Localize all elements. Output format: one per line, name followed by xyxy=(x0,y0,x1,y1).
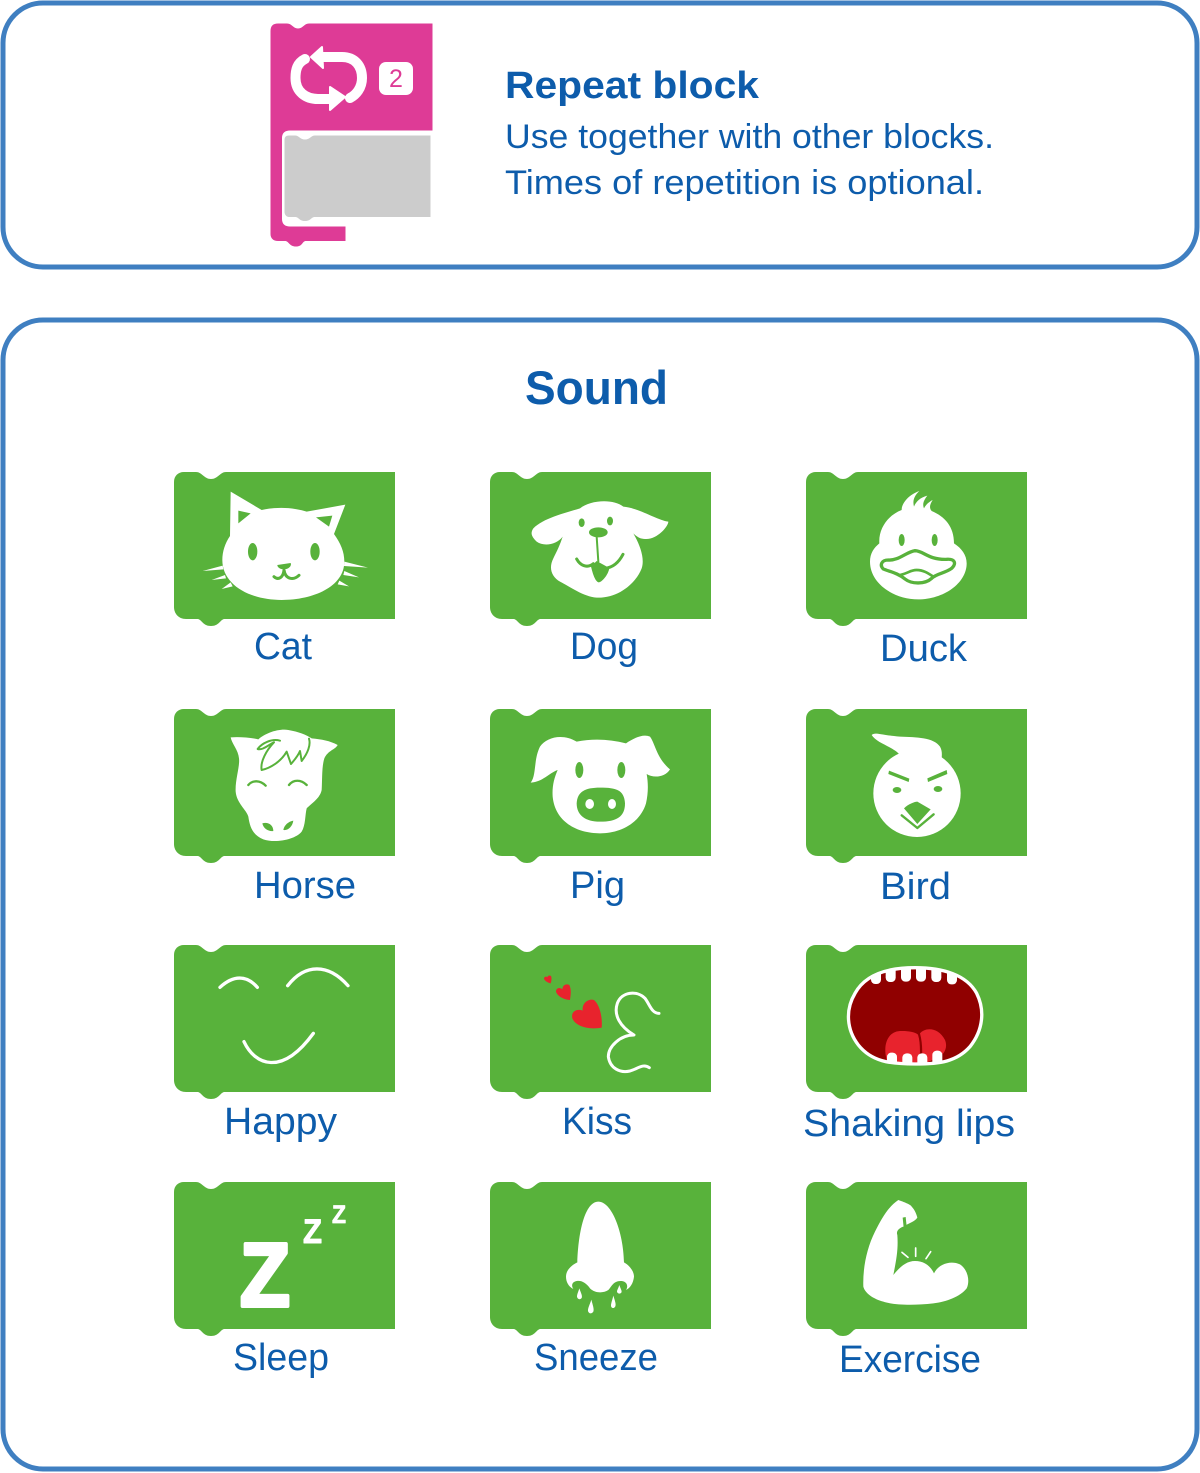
icon: flexed arm xyxy=(863,1200,968,1305)
label: Pig: Pig xyxy=(570,865,625,907)
block: sleep xyxy=(174,1182,395,1379)
green block: horse xyxy=(174,709,395,863)
panel border: sound xyxy=(3,320,1197,1469)
badge: repeat count xyxy=(379,62,413,95)
block: pig xyxy=(490,709,711,907)
block: sneeze xyxy=(490,1182,711,1379)
block: bird xyxy=(806,709,1027,908)
icon: sleeping Z letters: Z xyxy=(240,1226,290,1326)
panel: sound xyxy=(3,320,1197,1469)
icon: bird face xyxy=(872,734,961,837)
green block: sleep xyxy=(174,1182,395,1336)
icon: open mouth xyxy=(848,963,982,1070)
badge: repeat count: 2 xyxy=(389,65,403,93)
green block: kiss xyxy=(490,945,711,1099)
label: Sleep: Sleep xyxy=(233,1337,329,1379)
label: Horse: Horse xyxy=(254,865,356,907)
icon: horse face xyxy=(231,730,338,841)
green block: duck xyxy=(806,472,1027,626)
grey empty slot xyxy=(284,136,430,221)
panel: repeat block xyxy=(3,3,1197,267)
pink block body xyxy=(270,24,432,246)
icon: sneezing nose xyxy=(566,1202,634,1313)
label: Shaking lips: Shaking lips xyxy=(803,1103,1015,1145)
icon: sleeping Z letters: Z xyxy=(332,1201,346,1229)
label: Sneeze: Sneeze xyxy=(534,1337,658,1379)
green block: exercise xyxy=(806,1182,1027,1336)
green block: bird xyxy=(806,709,1027,863)
block: duck xyxy=(806,472,1027,670)
label: Kiss: Kiss xyxy=(562,1101,632,1143)
green block: shaking lips xyxy=(806,945,1027,1099)
green block: happy xyxy=(174,945,395,1099)
icon: repeat block xyxy=(270,24,432,246)
text block: repeat description: Times of repetition is optional. xyxy=(505,164,984,202)
icon: cat face xyxy=(203,492,368,600)
block: exercise xyxy=(806,1182,1027,1381)
text block: repeat description xyxy=(505,118,994,202)
block: dog xyxy=(490,472,711,668)
block: cat xyxy=(174,472,395,668)
green block: dog xyxy=(490,472,711,626)
green block: sneeze xyxy=(490,1182,711,1336)
label: Cat: Cat xyxy=(254,626,312,668)
block: shaking lips xyxy=(803,945,1027,1145)
text block: repeat description: Use together with other blocks. xyxy=(505,118,994,156)
icon: sleeping Z letters xyxy=(240,1201,346,1326)
block: horse xyxy=(174,709,395,907)
icon: pig face xyxy=(531,736,670,833)
label: Bird: Bird xyxy=(880,866,951,908)
label: Dog: Dog xyxy=(570,626,638,668)
heading: sound: Sound xyxy=(525,361,668,414)
green block: pig xyxy=(490,709,711,863)
label: Duck: Duck xyxy=(880,628,968,670)
block: happy xyxy=(174,945,395,1143)
block: kiss xyxy=(490,945,711,1143)
icon: happy face xyxy=(220,969,348,1063)
green block: cat xyxy=(174,472,395,626)
heading: repeat block: Repeat block xyxy=(505,65,760,107)
label: Exercise: Exercise xyxy=(839,1339,981,1381)
icon: duck face xyxy=(870,491,967,599)
label: Happy: Happy xyxy=(224,1101,337,1143)
icon: dog face xyxy=(532,501,668,598)
icon: kiss lips and hearts xyxy=(544,975,659,1072)
icon: sleeping Z letters: Z xyxy=(303,1213,322,1251)
icon: loop arrows xyxy=(296,47,362,110)
panel border: repeat block xyxy=(3,3,1197,267)
